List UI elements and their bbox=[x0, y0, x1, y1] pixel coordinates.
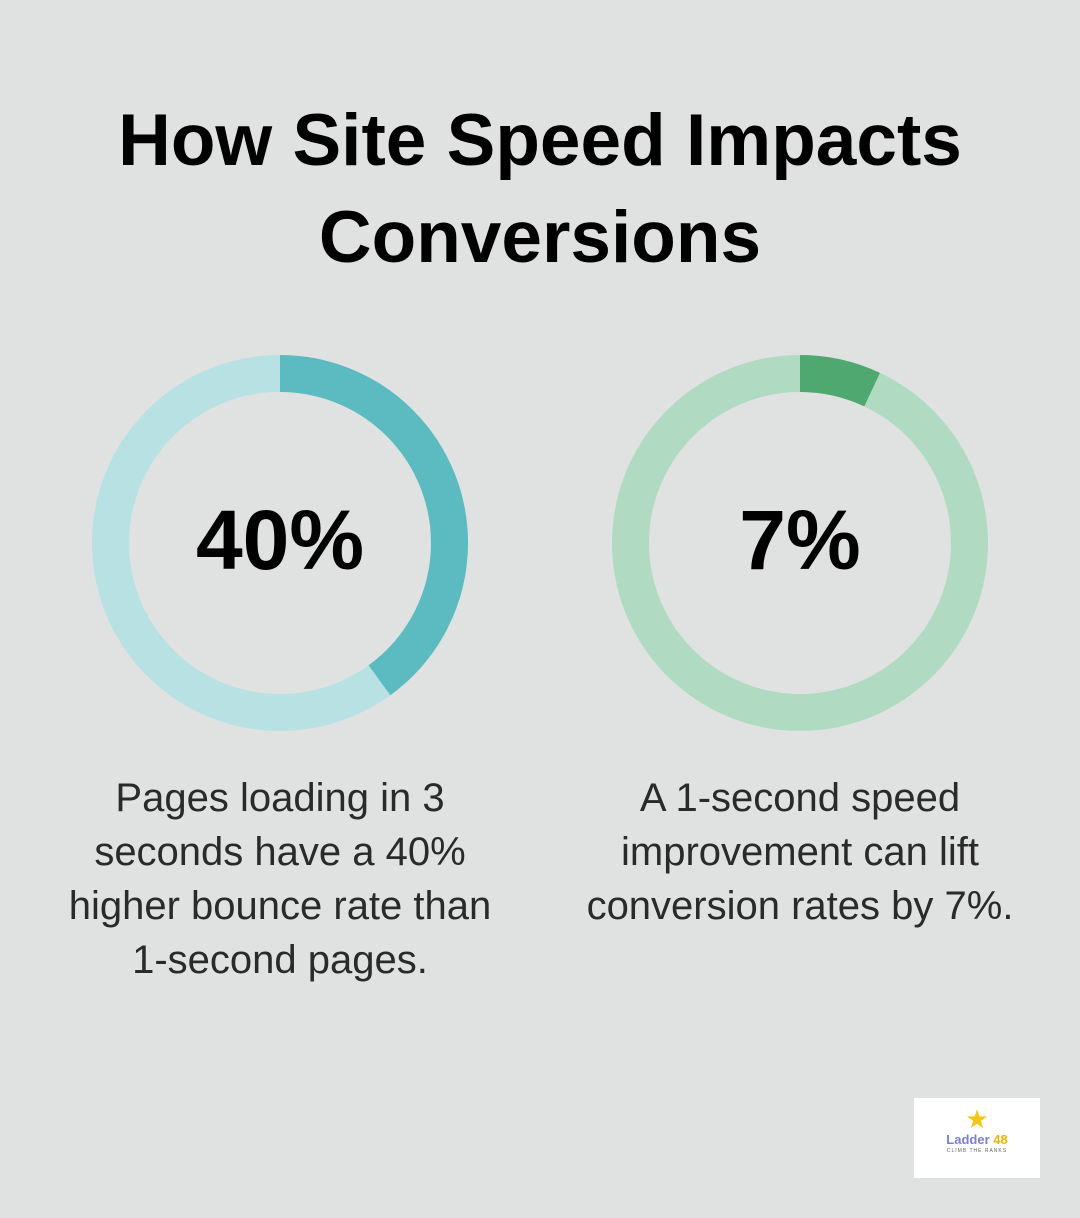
donut: 40%: 40% bbox=[196, 493, 364, 587]
logo bbox=[914, 1098, 1040, 1178]
chart: donuts bbox=[92, 355, 988, 731]
text: left description: 1-second pages. bbox=[132, 938, 428, 982]
text: right description: improvement can lift bbox=[621, 830, 979, 874]
logo: Ladder 48 bbox=[946, 1132, 1008, 1147]
title: How Site Speed Impacts bbox=[118, 100, 962, 181]
logo: CLIMB THE RANKS bbox=[947, 1148, 1007, 1154]
title: Conversions bbox=[319, 197, 761, 278]
text: left description: Pages loading in 3 bbox=[115, 776, 445, 820]
donut: 7% bbox=[630, 374, 970, 712]
text: right description: conversion rates by 7%. bbox=[587, 884, 1013, 928]
donut: 7%: 7% bbox=[739, 493, 861, 587]
icon: star: ★ bbox=[965, 1104, 989, 1134]
text: left description: seconds have a 40% bbox=[94, 830, 466, 874]
text: left description bbox=[69, 776, 491, 982]
text: left description: higher bounce rate than bbox=[69, 884, 491, 928]
title bbox=[118, 100, 962, 278]
donut: 40% bbox=[110, 374, 450, 712]
text: right description bbox=[587, 776, 1013, 928]
text: right description: A 1-second speed bbox=[640, 776, 960, 820]
